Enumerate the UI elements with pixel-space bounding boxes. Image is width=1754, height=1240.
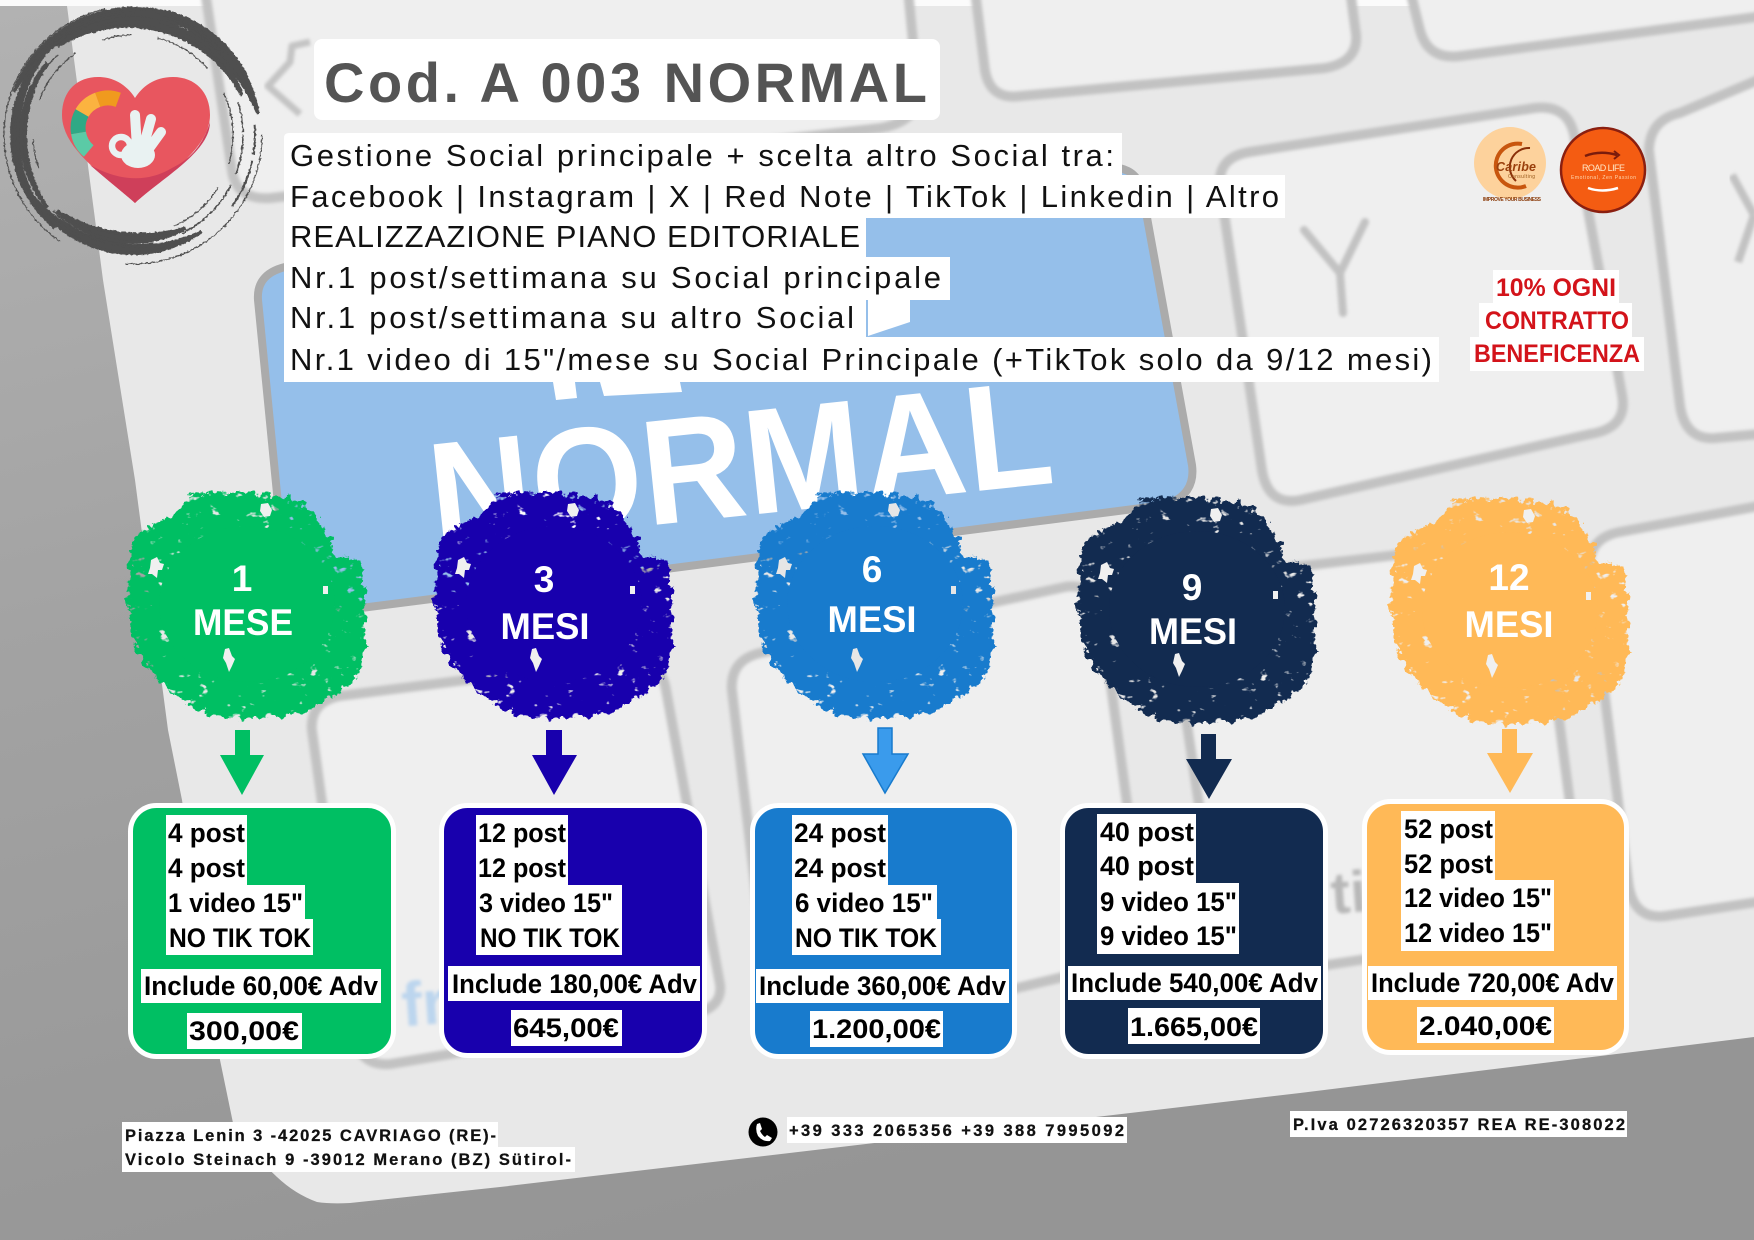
footer phone numbers: +39 333 2065356 +39 388 7995092 (789, 1122, 1124, 1140)
service description: Gestione Social principale + scelta altro Social tra: (290, 138, 1114, 173)
features: 3 video 15" (479, 888, 613, 918)
card (1364, 802, 1626, 1052)
features: NO TIK TOK (795, 923, 937, 953)
service description (284, 133, 1439, 382)
features: 1 video 15" (168, 888, 303, 918)
blob: 3 mesi (436, 493, 673, 718)
footer address (122, 1122, 575, 1172)
features: 6 video 15" (795, 888, 933, 918)
service description: REALIZZAZIONE PIANO EDITORIALE (290, 219, 860, 254)
blue key with NORMAL word (258, 167, 1192, 613)
footer VAT: P.Iva 02726320357 REA RE-308022 (1293, 1116, 1625, 1134)
blob: 6 mesi (757, 493, 994, 718)
adv budget: Include 360,00€ Adv (759, 971, 1006, 1001)
logo: Road Life: Emotional, Zen Passion (1571, 175, 1636, 181)
features: NO TIK TOK (169, 923, 311, 953)
features: 40 post (1100, 817, 1194, 847)
arrow (1487, 729, 1533, 793)
blob label: MESI (500, 606, 590, 647)
panel: 3 mesi (436, 493, 704, 1056)
logo: Caribe Consulting: IMPROVE YOUR BUSINESS (1483, 197, 1542, 203)
features (792, 815, 941, 955)
features: 12 video 15" (1404, 883, 1552, 913)
blob label (1464, 557, 1554, 645)
blob: 9 mesi (1079, 498, 1316, 723)
features (1401, 811, 1554, 951)
features: 4 post (168, 853, 245, 883)
blob label: MESI (1464, 604, 1554, 645)
price: 1.200,00€ (812, 1014, 941, 1044)
logo: Road Life: ROAD LIFE (1582, 163, 1625, 173)
logo: heart with ring (4, 6, 262, 264)
service description: Nr.1 post/settimana su altro Social (290, 300, 854, 335)
footer address: Piazza Lenin 3 -42025 CAVRIAGO (RE)- (125, 1127, 496, 1145)
card (130, 806, 394, 1056)
logo: Caribe Consulting: Consulting (1508, 174, 1535, 180)
footer address: Vicolo Steinach 9 -39012 Merano (BZ) Sütirol- (125, 1151, 571, 1169)
logo: Caribe Consulting: Caribe (1496, 160, 1536, 174)
blob label (828, 549, 916, 640)
card (752, 806, 1014, 1056)
panel: 12 mesi (1364, 499, 1629, 1052)
adv budget: Include 60,00€ Adv (144, 971, 378, 1001)
arrow (532, 730, 577, 795)
blob label (500, 559, 590, 647)
charity note (1470, 270, 1644, 371)
features: 12 post (478, 853, 566, 883)
price: 2.040,00€ (1419, 1011, 1552, 1041)
price: 645,00€ (513, 1013, 619, 1043)
blob label: MESI (1149, 611, 1237, 652)
card (442, 806, 704, 1056)
heart (62, 77, 210, 203)
features: NO TIK TOK (480, 923, 620, 953)
features (166, 815, 313, 955)
service description: Facebook | Instagram | X | Red Note | TikTok | Linkedin | Altro (290, 179, 1279, 214)
title: Cod. A 003 NORMAL (324, 51, 927, 114)
logo: Road Life (1561, 128, 1645, 212)
features: 52 post (1404, 814, 1493, 844)
features: 40 post (1100, 851, 1194, 881)
card (1062, 806, 1326, 1056)
service description: Nr.1 post/settimana su Social principale (290, 260, 941, 295)
footer VAT (1290, 1111, 1627, 1137)
charity note: BENEFICENZA (1474, 340, 1640, 368)
panel: 1 mese (129, 493, 394, 1056)
features (476, 815, 622, 955)
charity note: 10% OGNI (1496, 274, 1616, 302)
features: 9 video 15" (1100, 887, 1237, 917)
blob: 12 mesi (1392, 499, 1629, 724)
panel: 6 mesi (752, 493, 1014, 1056)
blob label (1149, 567, 1237, 652)
logo: Caribe Consulting (1474, 127, 1546, 203)
charity note: CONTRATTO (1485, 307, 1629, 335)
gauge (78, 98, 118, 151)
price: 1.665,00€ (1130, 1012, 1258, 1042)
adv budget: Include 540,00€ Adv (1071, 968, 1318, 998)
blob label: MESI (828, 599, 916, 640)
arrow (1186, 734, 1232, 799)
service description: Nr.1 video di 15"/mese su Social Principale (+TikTok solo da 9/12 mesi) (290, 342, 1432, 377)
blob label (193, 558, 293, 643)
adv budget: Include 720,00€ Adv (1371, 968, 1614, 998)
adv budget: Include 180,00€ Adv (452, 969, 697, 999)
arrow (863, 728, 908, 793)
features: 24 post (794, 818, 886, 848)
blob label: 1 (232, 558, 252, 599)
features (1097, 814, 1239, 954)
blob label: MESE (193, 602, 293, 643)
price: 300,00€ (189, 1016, 299, 1046)
panel: 9 mesi (1062, 498, 1326, 1056)
word NORMAL: NORMAL (421, 347, 1060, 580)
features: 9 video 15" (1100, 921, 1237, 951)
key legend: partial Y on next key (1732, 175, 1754, 262)
features: 52 post (1404, 849, 1493, 879)
features: 4 post (168, 818, 245, 848)
footer phone numbers (787, 1117, 1127, 1143)
blob: 1 mese (129, 493, 366, 718)
brush ring (4, 6, 262, 264)
blob label: 9 (1182, 567, 1202, 608)
features: 24 post (794, 853, 886, 883)
blurred key legend: blue f: fr (399, 968, 449, 1040)
blob label: 3 (534, 559, 554, 600)
arrow (220, 730, 264, 795)
key legend: tab arrow (268, 42, 310, 114)
blurred key legend: grey ti: ti (1329, 859, 1368, 927)
blob label: 6 (862, 549, 882, 590)
features: 12 post (478, 818, 566, 848)
partial word behind description (553, 298, 910, 400)
key legend: Y (1304, 222, 1365, 313)
features: 12 video 15" (1404, 918, 1552, 948)
blob label: 12 (1488, 557, 1530, 598)
hand OK sign (112, 115, 161, 168)
icon: phone (748, 1118, 778, 1146)
heart shade (90, 122, 210, 203)
